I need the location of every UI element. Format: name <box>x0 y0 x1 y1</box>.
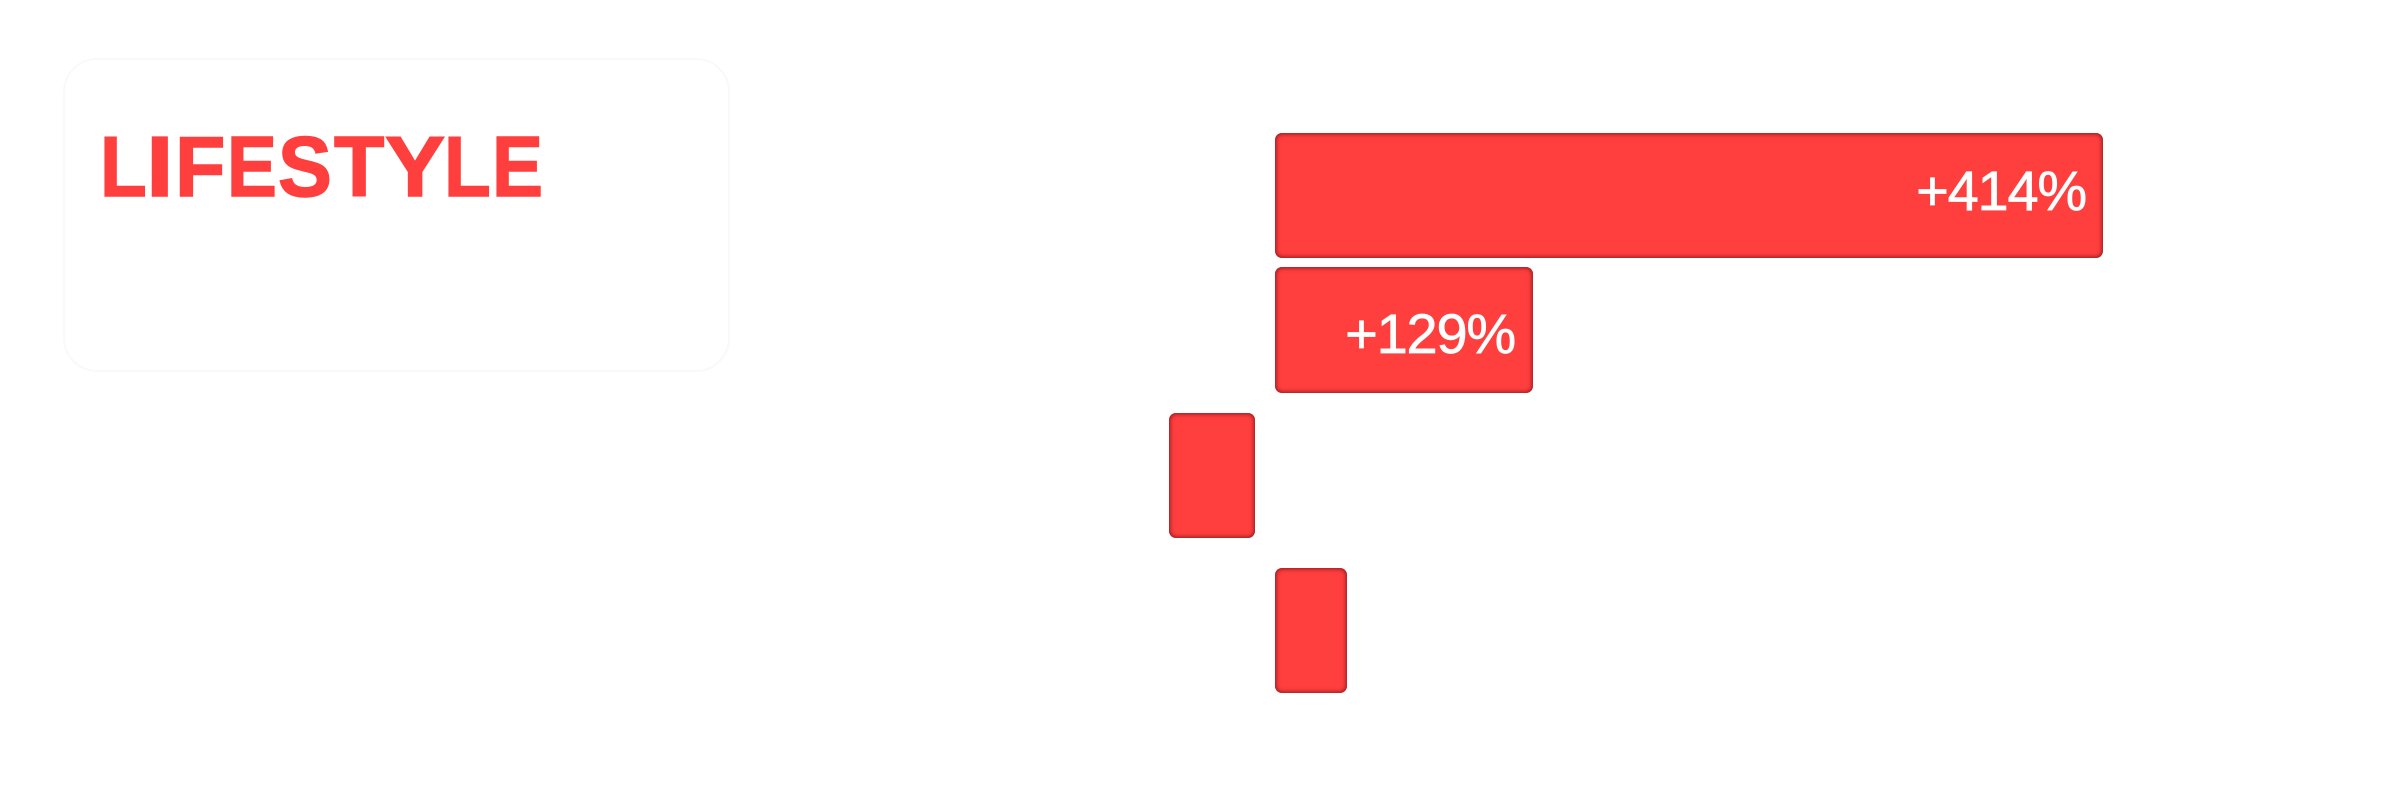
heading: LIFESTYLE: S <box>278 120 332 215</box>
heading: LIFESTYLE: E <box>492 120 543 215</box>
heading: LIFESTYLE: I <box>146 120 173 215</box>
panel: lifestyle card <box>63 58 730 372</box>
heading: LIFESTYLE: T <box>334 120 384 215</box>
bar: negative value <box>1169 413 1255 538</box>
heading: LIFESTYLE: E <box>227 120 277 215</box>
value label: +129%: +129% <box>1345 302 1515 365</box>
heading: LIFESTYLE: L <box>100 120 147 215</box>
bar: +414% <box>1275 133 2103 258</box>
heading: LIFESTYLE: L <box>444 120 491 215</box>
heading: LIFESTYLE <box>100 120 543 215</box>
bar: small positive value <box>1275 568 1347 693</box>
heading: LIFESTYLE: F <box>174 120 225 215</box>
value label: +414%: +414% <box>1916 159 2086 222</box>
bar: +129% <box>1275 267 1533 393</box>
heading: LIFESTYLE: Y <box>384 120 445 215</box>
